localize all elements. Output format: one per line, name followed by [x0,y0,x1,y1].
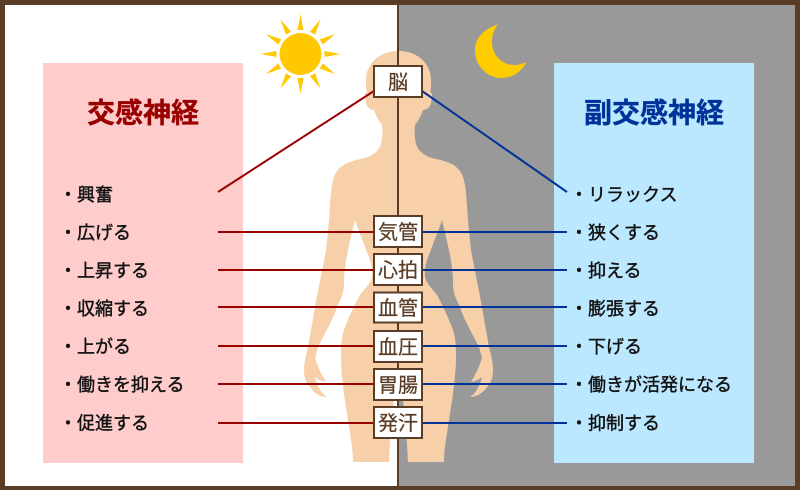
organ: sweating [374,407,422,438]
organ: heart rate: 心拍 [378,259,418,282]
organ: blood pressure: 血圧 [378,336,418,359]
list: sympathetic effects: ・広げる [59,223,131,243]
organ: blood vessels [374,292,422,322]
list: sympathetic effects: ・興奮 [59,185,113,205]
list: parasympathetic effects: ・狭くする [570,223,660,243]
panel: parasympathetic nerve [554,63,754,463]
organ: blood pressure [374,331,422,362]
organ: gut: 胃腸 [378,375,418,397]
heading: sympathetic: 交感神経 [87,98,199,128]
list: parasympathetic effects: ・抑える [570,261,641,281]
red connector lines [218,91,374,423]
icon: sun [260,14,340,94]
organ labels [374,66,422,438]
organ: brain [374,66,422,97]
icon: crescent moon [475,24,527,78]
human body silhouette [304,51,493,462]
list: sympathetic effects: ・上昇する [59,261,149,281]
background: day side [0,0,398,490]
organ: brain: 脳 [388,71,408,94]
list: parasympathetic effects: ・膨張する [570,299,660,319]
organ: trachea: 気管 [378,221,418,244]
list: parasympathetic effects: ・リラックス [570,185,677,205]
list: parasympathetic effects [570,185,732,434]
central divider line [397,0,399,490]
list: sympathetic effects: ・収縮する [59,299,149,319]
list: parasympathetic effects: ・働きが活発になる [570,375,732,395]
list: sympathetic effects: ・働きを抑える [59,375,184,395]
organ: heart rate [374,254,422,285]
blue connector lines [422,91,567,423]
panel: sympathetic nerve [43,63,243,463]
list: parasympathetic effects: ・抑制する [570,414,660,434]
list: sympathetic effects: ・促進する [59,414,149,434]
list: sympathetic effects: ・上がる [59,337,131,357]
organ: blood vessels: 血管 [378,297,418,320]
organ: trachea [374,216,422,247]
background: night side [398,0,800,490]
heading: parasympathetic: 副交感神経 [584,98,724,128]
organ: sweating: 発汗 [378,412,418,435]
list: parasympathetic effects: ・下げる [570,337,642,357]
list: sympathetic effects [59,185,184,434]
organ: gut [374,369,422,400]
